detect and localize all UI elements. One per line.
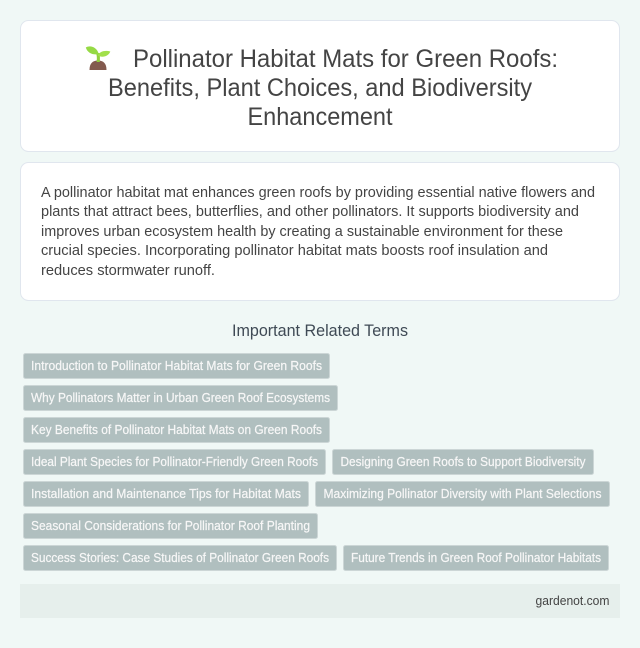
text block: description: A pollinator habitat mat enhances green roofs by providing essential native flowers and (41, 184, 595, 201)
panel: description (20, 162, 620, 300)
title (108, 45, 558, 131)
tag: Introduction to Pollinator Habitat Mats for Green Roofs (31, 359, 322, 373)
panel: title card (20, 20, 620, 152)
heading: related terms: Important Related Terms (232, 322, 408, 340)
footer text: gardenot.com (536, 594, 610, 608)
tag: Installation and Maintenance Tips for Habitat Mats (31, 487, 301, 501)
tag: Future Trends in Green Roof Pollinator Habitats (351, 551, 601, 565)
tag (316, 482, 610, 506)
tag (24, 546, 336, 570)
tag (24, 354, 330, 378)
tag (24, 482, 308, 506)
tag (24, 514, 318, 538)
tag: Ideal Plant Species for Pollinator-Friendly Green Roofs (31, 455, 318, 469)
tag (24, 450, 326, 474)
text block: description (41, 184, 595, 279)
text block: description: plants that attract bees, butterflies, and other pollinators. It supports biodiversity and (41, 203, 579, 220)
text block: description: reduces stormwater runoff. (41, 262, 215, 279)
tag: Key Benefits of Pollinator Habitat Mats on Green Roofs (31, 423, 322, 437)
tag: Why Pollinators Matter in Urban Green Roof Ecosystems (31, 391, 330, 405)
title: Pollinator Habitat Mats for Green Roofs: (133, 45, 558, 73)
footer (20, 584, 620, 618)
tags: related terms (24, 354, 610, 570)
tag (24, 418, 330, 442)
tag (24, 386, 338, 410)
tag (344, 546, 608, 570)
text block: description: improves urban ecosystem health by creating a sustainable environment for these (41, 223, 563, 240)
icon: seedling (86, 46, 110, 70)
title: Enhancement (248, 103, 393, 131)
tag: Maximizing Pollinator Diversity with Plant Selections (324, 487, 602, 501)
tag: Designing Green Roofs to Support Biodiversity (340, 455, 586, 469)
title: Benefits, Plant Choices, and Biodiversity (108, 74, 532, 102)
text block: description: crucial species. Incorporating pollinator habitat mats boosts roof insulation and (41, 242, 548, 259)
tag (332, 450, 594, 474)
tag: Success Stories: Case Studies of Pollinator Green Roofs (31, 551, 329, 565)
tag: Seasonal Considerations for Pollinator Roof Planting (31, 519, 310, 533)
